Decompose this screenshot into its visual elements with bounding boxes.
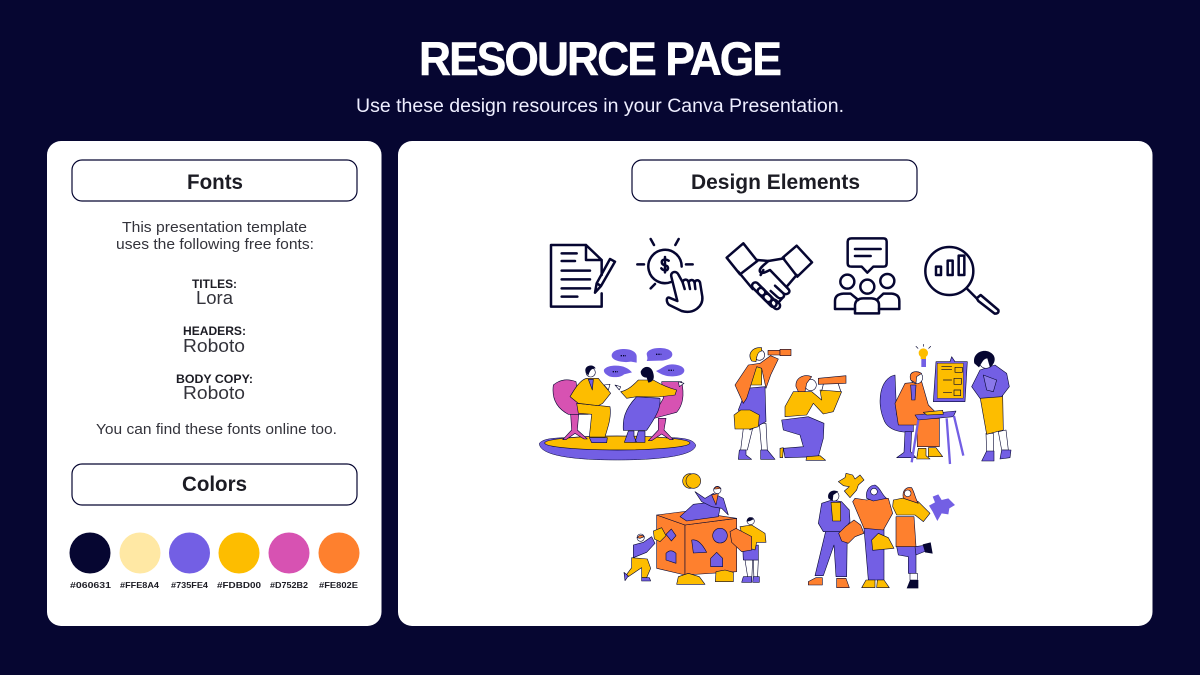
swatch: #FFE8A4: #FFE8A4 [120, 580, 159, 590]
text block: body copy font: Roboto [183, 383, 245, 403]
text block: titles font: Lora [196, 288, 234, 308]
text block: headers font [183, 324, 246, 356]
heading: design elements [632, 160, 917, 201]
heading: fonts: Fonts [187, 171, 243, 194]
text block: titles font [192, 277, 237, 308]
swatch: #060631: #060631 [70, 580, 111, 590]
illustration: woman with telescope and handbag [734, 348, 780, 459]
swatch: #FDBD00 [217, 532, 261, 590]
text block: headers font: Roboto [183, 336, 245, 356]
text block: body copy font [176, 372, 253, 403]
swatch: #735FE4 [169, 532, 210, 590]
illustration: team holding puzzle pieces [808, 473, 955, 588]
illustration: person at desk and woman with checklist [880, 344, 1011, 464]
icon: handshake [727, 243, 812, 310]
heading: fonts [72, 160, 357, 201]
swatch: #D752B2 [268, 532, 310, 590]
illustration: talk show interview [539, 348, 696, 460]
color palette [70, 532, 360, 590]
heading: colors [72, 464, 357, 505]
swatch: #FDBD00: #FDBD00 [217, 580, 261, 590]
icon: document and pencil [551, 245, 615, 307]
text block: font intro: uses the following free fonts: [116, 236, 314, 253]
text block: font intro [116, 219, 314, 253]
heading: colors: Colors [182, 473, 247, 496]
icon: magnifier with bar chart [925, 247, 999, 314]
illustration: kneeling person with telescope [780, 349, 846, 460]
swatch: #FE802E: #FE802E [319, 580, 358, 590]
swatch: #735FE4: #735FE4 [171, 580, 208, 590]
swatch: #FFE8A4 [120, 532, 160, 590]
text block: find fonts note: You can find these fonts online too. [96, 421, 337, 438]
text block: font intro: This presentation template [122, 219, 307, 236]
panel: fonts and colors [47, 141, 382, 626]
icon row [551, 238, 999, 314]
text block: titles font: TITLES: [192, 277, 237, 291]
text block: headers font: HEADERS: [183, 324, 246, 338]
icon: group with speech bubble [835, 238, 899, 313]
swatch: #FE802E [318, 532, 360, 590]
subtitle: Use these design resources in your Canva Presentation. [356, 96, 844, 117]
panel: design elements [398, 141, 1152, 626]
swatch: #060631 [70, 532, 111, 590]
title: RESOURCE PAGE [419, 32, 781, 85]
swatch: #D752B2: #D752B2 [270, 580, 308, 590]
heading: design elements: Design Elements [691, 171, 860, 194]
icon: dollar coin with pointing hand [637, 239, 702, 312]
illustration: team building shape cube [624, 474, 766, 584]
text block: body copy font: BODY COPY: [176, 372, 253, 386]
